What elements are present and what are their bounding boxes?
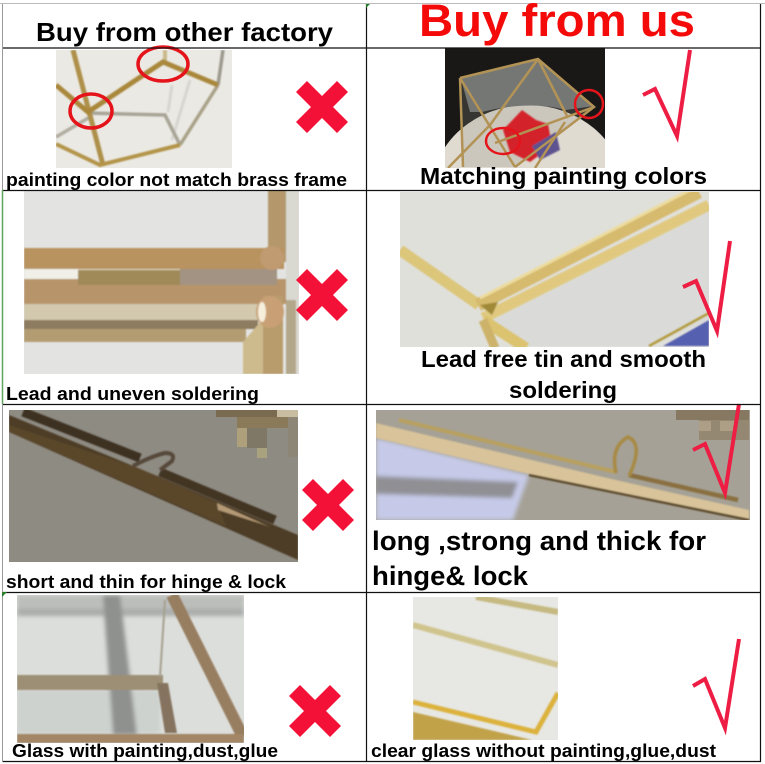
photo: brass frame, mismatched colour (56, 50, 232, 168)
icon: cross (289, 685, 341, 737)
icon: check mark (693, 639, 739, 728)
caption: lead free (421, 346, 706, 403)
caption: clear glass: clear glass without painting,glue,dust (371, 741, 716, 761)
caption: short and thin: short and thin for hinge & lock (6, 572, 287, 592)
photo: matching painted geometric box (445, 48, 605, 168)
photo: glass with painting, dust, glue (17, 595, 244, 743)
highlight circles: frame joints (70, 47, 188, 128)
caption: glass with painting: Glass with painting,dust,glue (12, 741, 278, 761)
icon: check mark (643, 50, 690, 136)
caption: long strong: long ,strong and thick for (372, 526, 706, 556)
icon: check mark (693, 404, 739, 493)
photo: lead uneven soldering (24, 190, 299, 374)
caption: painting color: painting color not match brass frame (6, 170, 347, 190)
caption: matching: Matching painting colors (420, 163, 707, 189)
photo: clear glass (413, 597, 558, 740)
heading: Buy from other factory: Buy from other factory (36, 17, 334, 47)
icon: cross (296, 81, 348, 133)
icon: check mark (683, 241, 730, 331)
highlight circles: matching joints (486, 90, 603, 154)
caption: long strong: hinge& lock (372, 561, 529, 591)
photo: short thin hinge and lock (9, 410, 298, 562)
caption: long strong (372, 526, 706, 591)
icon: cross (302, 479, 354, 531)
caption: lead soldering: Lead and uneven soldering (6, 384, 259, 404)
icon: cross (296, 269, 348, 321)
photo: long strong thick hinge and lock (376, 410, 750, 520)
caption: lead free: soldering (509, 377, 617, 403)
caption: lead free: Lead free tin and smooth (421, 346, 706, 372)
photo: lead-free smooth soldering (400, 188, 709, 348)
